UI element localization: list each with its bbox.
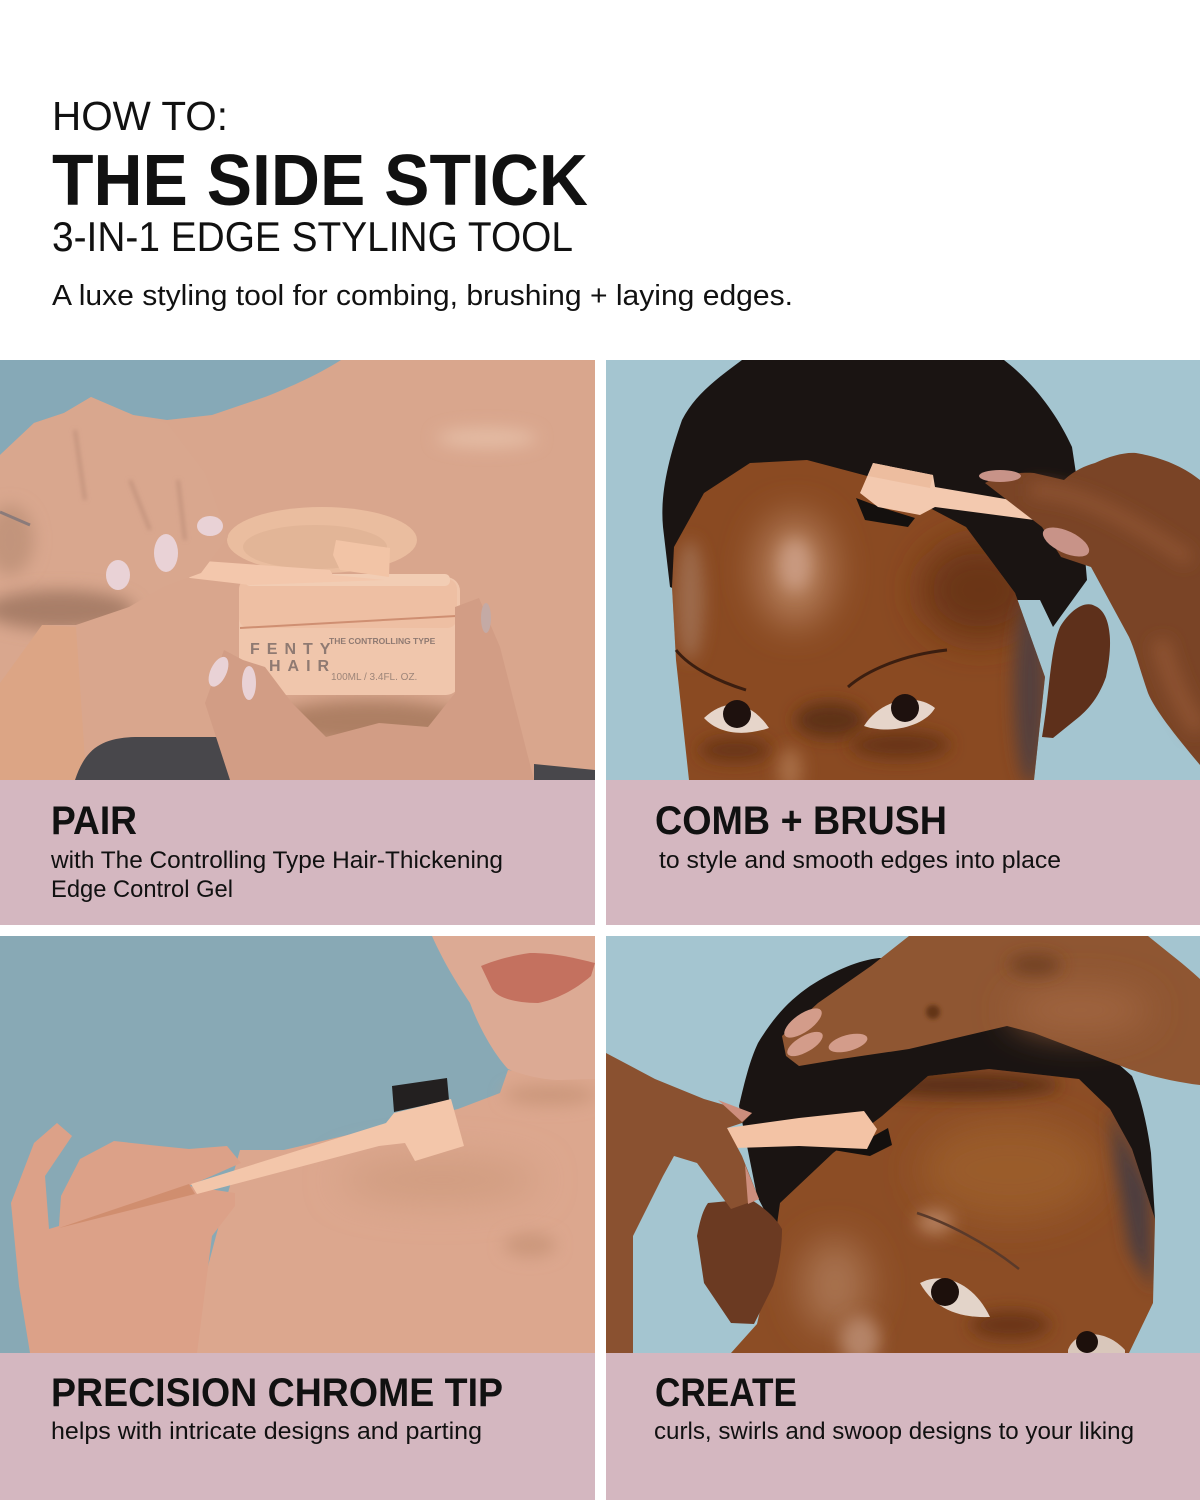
caption background (606, 1353, 1200, 1500)
description: A luxe styling tool for combing, brushing + laying edges. (52, 280, 793, 312)
panel: precision chrome tip (0, 936, 596, 1500)
ear (1042, 604, 1110, 738)
brow (917, 1213, 1019, 1269)
tool (727, 1111, 877, 1149)
face (731, 1069, 1155, 1353)
tool (191, 1099, 464, 1194)
lower hand (205, 598, 534, 780)
header block (52, 93, 793, 312)
size: 100ML / 3.4FL. OZ. (331, 672, 417, 683)
panel: pair (0, 360, 595, 925)
caption heading: CREATE (655, 1371, 797, 1415)
panel: create (606, 936, 1200, 1500)
caption heading: PRECISION CHROME TIP (51, 1371, 503, 1415)
tool (860, 463, 1033, 520)
chrome tip (59, 1184, 195, 1228)
caption text: helps with intricate designs and parting (51, 1418, 482, 1445)
product name: THE CONTROLLING TYPE (329, 636, 436, 646)
caption text (50, 847, 503, 903)
tool handle and comb (189, 540, 390, 584)
brows (676, 650, 947, 690)
chin (432, 936, 595, 1080)
face (672, 460, 1045, 780)
brand: FENTY (250, 641, 337, 658)
hair (739, 958, 1155, 1240)
caption text: curls, swirls and swoop designs to your liking (654, 1418, 1134, 1445)
right eye (864, 694, 935, 730)
hand (11, 1123, 241, 1353)
brush bristles (833, 1128, 892, 1156)
heading: how to: HOW TO: (52, 93, 228, 139)
caption background (0, 1353, 595, 1500)
second eye (1068, 1331, 1125, 1353)
ear (697, 1199, 782, 1324)
photo: styling edges on hairline (606, 936, 1200, 1364)
eye (920, 1278, 990, 1317)
left hand (606, 1053, 759, 1353)
hair (662, 360, 1087, 627)
left eye (704, 700, 769, 733)
title: THE SIDE STICK (52, 141, 588, 221)
caption heading: COMB + BRUSH (655, 799, 947, 843)
lips (481, 953, 595, 1003)
bristles (392, 1078, 449, 1112)
caption text: Edge Control Gel (51, 876, 233, 903)
brand line two: HAIR (269, 658, 336, 675)
photo: brushing edges on forehead (606, 360, 1200, 792)
caption text: with The Controlling Type Hair-Thickening (50, 847, 503, 874)
panel: comb + brush (606, 360, 1200, 925)
jar (239, 574, 460, 695)
photo: hand pairing tool with gel jar (0, 360, 595, 780)
subtitle: 3-IN-1 EDGE STYLING TOOL (52, 213, 573, 260)
shoulder and neck (185, 1070, 595, 1353)
caption text: to style and smooth edges into place (659, 847, 1061, 874)
hand (985, 453, 1200, 765)
caption heading: PAIR (51, 799, 137, 843)
caption background (0, 780, 595, 925)
brush bristles (856, 498, 915, 527)
top hand (782, 936, 1200, 1085)
upper hand (0, 397, 228, 578)
caption background (606, 780, 1200, 925)
photo: hand holding tool by chrome tip (0, 936, 596, 1353)
